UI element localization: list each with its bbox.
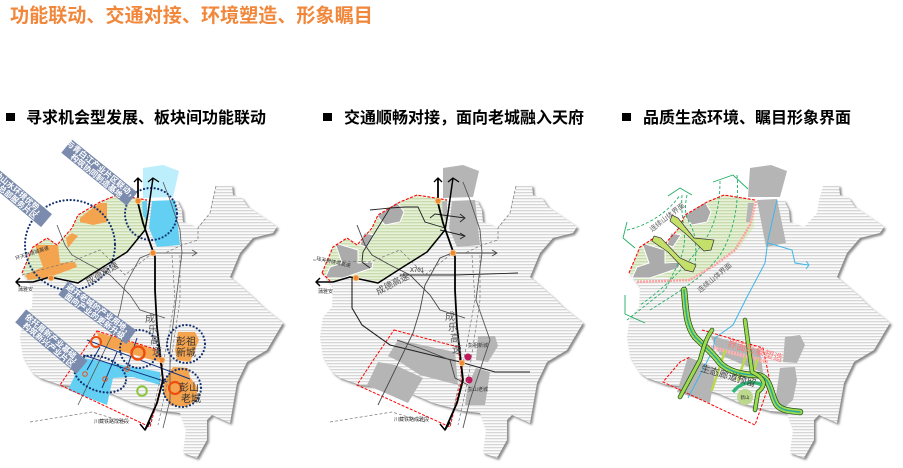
map labels: 高 bbox=[450, 332, 460, 345]
rings bbox=[83, 337, 181, 396]
map labels: 环天府绕城高速 bbox=[316, 255, 351, 269]
map labels: 彭山老城 bbox=[468, 386, 488, 393]
blue rivers bbox=[688, 200, 809, 398]
map labels: 川藏铁路成雅段 bbox=[94, 418, 129, 425]
map labels: 老城 bbox=[181, 392, 201, 405]
map labels: 乐 bbox=[148, 324, 158, 336]
thin roads bbox=[57, 182, 197, 428]
map labels: 成德高速 bbox=[374, 270, 411, 297]
map labels: 速 bbox=[152, 346, 162, 358]
pink and red boundary bbox=[629, 195, 755, 273]
interchange dots bbox=[353, 198, 465, 366]
thin roads bbox=[352, 182, 530, 428]
slanted callouts: 构筑新兴产业片区 bbox=[21, 320, 76, 369]
green chevrons bbox=[623, 175, 748, 323]
map labels bbox=[648, 201, 785, 390]
map labels: 成 bbox=[145, 313, 155, 325]
main expressways bbox=[316, 178, 463, 430]
map labels: 彭祖 bbox=[176, 335, 196, 348]
slanted callouts bbox=[0, 138, 139, 374]
red dashed boundary north bbox=[22, 195, 147, 273]
map labels: 彭祖新城 bbox=[468, 342, 488, 349]
hill settlements bbox=[632, 202, 711, 278]
map labels: 乐 bbox=[448, 322, 458, 334]
blue zones north bbox=[142, 165, 180, 247]
mountain node: 鹤山 bbox=[740, 394, 750, 401]
red dashed boundary south bbox=[357, 330, 462, 427]
dashed boundary lines bbox=[22, 186, 216, 425]
heading: panel 3: 品质生态环境、瞩目形象界面 bbox=[643, 108, 851, 127]
slanted callouts: 构筑协同制造基地 bbox=[69, 152, 125, 200]
grey land blocks south bbox=[367, 336, 498, 405]
hill settlements bbox=[325, 202, 404, 278]
slanted callouts: 避开老城的产业用地， bbox=[64, 282, 135, 337]
map labels: 蒲雅安 bbox=[318, 288, 333, 295]
red dashed frame bbox=[663, 330, 770, 425]
green dashed framing lines bbox=[627, 175, 738, 320]
panel: traffic connection map bbox=[313, 165, 585, 460]
map labels bbox=[316, 255, 488, 423]
map labels: 成德高速 bbox=[84, 259, 120, 287]
slanted callouts: 与青白江产业片区联动， bbox=[64, 138, 139, 201]
panel: ecology and image map bbox=[623, 165, 892, 460]
dotted circles bbox=[25, 188, 205, 407]
map labels: 生态廊道预留 bbox=[699, 362, 757, 390]
map labels: 新城 bbox=[176, 346, 196, 359]
map labels: 彭山 bbox=[179, 381, 199, 394]
red dashed boundary south bbox=[60, 331, 163, 427]
heading: panel 2: 交通顺畅对接，面向老城融入天府 bbox=[344, 108, 584, 127]
map labels: 成 bbox=[445, 311, 455, 323]
map labels: X701 bbox=[410, 268, 425, 274]
map labels: 环天府绕城高速 bbox=[14, 244, 50, 262]
map labels: 速 bbox=[452, 344, 462, 356]
title: 功能联动、交通对接、环境塑造、形象瞩目 bbox=[10, 4, 373, 27]
grey blocks bbox=[677, 165, 805, 407]
map labels: 连续山体界面 bbox=[648, 201, 686, 234]
map labels bbox=[14, 244, 201, 425]
map labels: 连续山体界面 bbox=[696, 261, 733, 295]
grey land blocks north bbox=[442, 165, 480, 247]
slanted callouts: 面向产业的更新升级 bbox=[63, 291, 127, 341]
interchange dots bbox=[48, 198, 165, 363]
map labels: 界面形象塑造 bbox=[726, 337, 785, 365]
metro stations bbox=[464, 354, 472, 384]
map labels: 蒲雅安 bbox=[18, 286, 33, 293]
interface belt bbox=[702, 345, 768, 362]
south orange and blue zones bbox=[68, 332, 199, 407]
map labels: 高 bbox=[150, 334, 160, 347]
dashed boundary lines bbox=[313, 186, 516, 425]
map labels: 川藏铁路成雅段 bbox=[394, 416, 429, 423]
green arrows on hill bbox=[652, 215, 714, 272]
slanted callouts: 依托眉新产业基础， bbox=[23, 312, 85, 366]
orange zones on hill bbox=[25, 203, 107, 280]
green ecological corridors bbox=[680, 290, 800, 412]
blue axes bbox=[83, 338, 190, 388]
main expressways bbox=[16, 178, 163, 430]
mountain node bbox=[733, 383, 762, 405]
red dashed boundary north bbox=[322, 195, 447, 281]
heading: panel 1: 寻求机会型发展、板块间功能联动 bbox=[26, 108, 266, 127]
panel: function linkage map bbox=[0, 138, 285, 460]
